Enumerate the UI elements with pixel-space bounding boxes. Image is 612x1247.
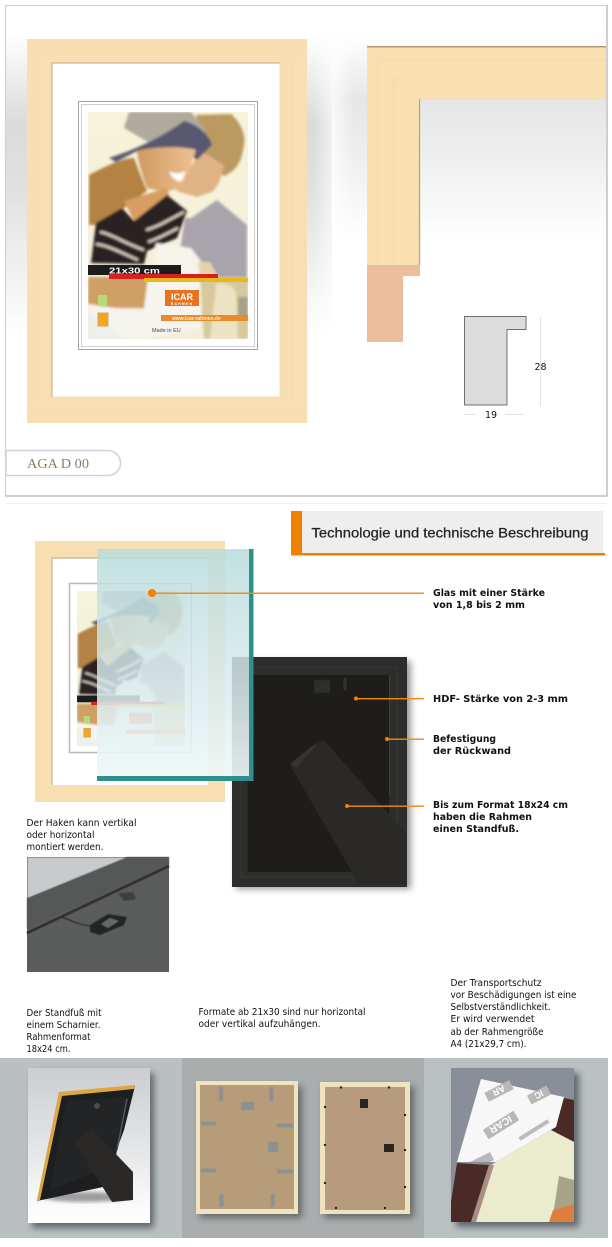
- text: hook note: montiert werden.: [26, 842, 104, 853]
- text: transport protection note: Er wird verwendet: [450, 1014, 535, 1025]
- profile drawing with dimensions: [464, 316, 547, 421]
- protector brand marks: [470, 1080, 551, 1162]
- model name pill: AGA D 00: [27, 456, 89, 471]
- easel stand: [290, 740, 406, 884]
- product photo: couple: Made in EU: [152, 328, 181, 334]
- callout: glass thickness: [148, 588, 545, 611]
- text: transport protection note: A4 (21x29,7 cm).: [450, 1039, 526, 1050]
- product photo: couple: ICAR: [171, 292, 193, 302]
- easel stand: [75, 1129, 133, 1202]
- callout: glass thickness: von 1,8 bis 2 mm: [433, 600, 525, 611]
- text: hook note: Der Haken kann vertikal: [26, 818, 136, 829]
- callout: HDF thickness: HDF- Stärke von 2-3 mm: [433, 694, 568, 705]
- text: easel note: einem Scharnier.: [26, 1020, 100, 1031]
- text: hook note: oder horizontal: [26, 830, 94, 841]
- product photo: couple: [88, 112, 248, 339]
- product frame front view: [27, 39, 307, 423]
- panel: product overview: [0, 0, 612, 500]
- exploded view: photo: [77, 591, 185, 746]
- text: easel note: 18x24 cm.: [26, 1044, 70, 1055]
- text: easel note: Der Standfuß mit: [26, 1008, 102, 1019]
- callout: easel stand: einen Standfuß.: [433, 824, 519, 835]
- model name pill: [6, 450, 120, 476]
- exploded view: front frame: [35, 541, 225, 802]
- text: transport protection note: Der Transportschutz: [450, 978, 542, 989]
- exploded view: glass pane: [97, 549, 254, 781]
- text: easel note: [26, 1008, 102, 1055]
- text: hanging note: Formate ab 21x30 sind nur horizontal: [198, 1007, 366, 1018]
- callout: back fastening: [385, 734, 511, 757]
- callout: easel stand: [345, 800, 568, 835]
- text: hook note: [26, 818, 136, 853]
- text: hanging note: [198, 1007, 366, 1030]
- text: easel note: Rahmenformat: [26, 1032, 91, 1043]
- heading: technology section: [291, 511, 605, 556]
- product photo: couple: RAHMEN: [171, 302, 193, 306]
- callout: HDF thickness: [354, 694, 568, 705]
- text: transport protection note: vor Beschädigungen ist eine: [450, 990, 577, 1001]
- callout: easel stand: Bis zum Format 18x24 cm: [433, 800, 568, 811]
- product photo: couple: www.icar-rahmen.de: [171, 316, 221, 322]
- dimension 19: 19: [485, 410, 497, 421]
- callout: glass thickness: Glas mit einer Stärke: [433, 588, 545, 599]
- text: transport protection note: Selbstverständlichkeit.: [450, 1002, 550, 1013]
- heading: technology section: Technologie und technische Beschreibung: [312, 524, 588, 540]
- product photo: couple: 21x30 cm: [109, 266, 161, 276]
- moulding cross-section: [367, 265, 420, 342]
- panel: bottom photo strip: [0, 1058, 608, 1238]
- text: transport protection note: ab der Rahmengröße: [450, 1027, 544, 1038]
- photo: corner protector: [451, 1068, 579, 1227]
- protector brand marks: ICAR: [486, 1113, 513, 1135]
- photo: back of frame with hangers: [320, 1082, 414, 1218]
- photo: hook close-up: [27, 857, 169, 972]
- photo: back of frame with clips: [196, 1081, 302, 1218]
- text: transport protection note: [450, 978, 577, 1050]
- protector brand marks: IC: [532, 1088, 545, 1101]
- protector brand marks: AR: [490, 1083, 507, 1098]
- callout: back fastening: Befestigung: [433, 734, 496, 745]
- callout: back fastening: der Rückwand: [433, 746, 511, 757]
- photo: standing frame with easel: [28, 1068, 154, 1228]
- dimension 28: 28: [534, 362, 547, 373]
- moulding corner detail: [367, 46, 606, 342]
- callout: easel stand: haben die Rahmen: [433, 812, 532, 823]
- text: hanging note: oder vertikal aufzuhängen.: [198, 1019, 320, 1030]
- exploded view: black back panel: [232, 657, 411, 889]
